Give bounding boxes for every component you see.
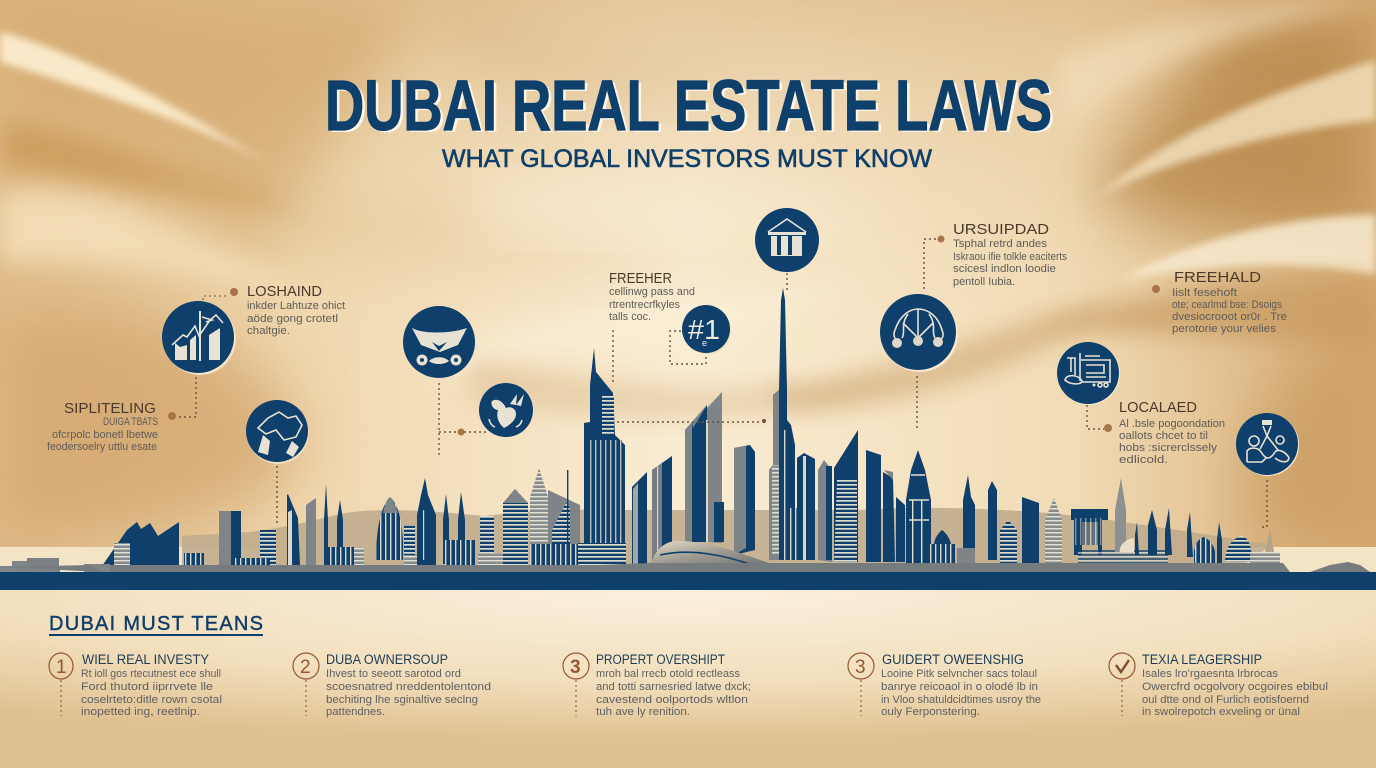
Burj tower xyxy=(769,288,795,560)
central towers xyxy=(632,472,647,565)
callout: LOCALAED: edlicold. xyxy=(1119,454,1168,466)
item 3: PROPERT OVERSHIPT xyxy=(596,652,725,667)
item 2: pattendnes. xyxy=(326,706,385,718)
callout: FREEHALD: perotorie your velies xyxy=(1172,323,1277,335)
callout: LOSHAIND: chaltgie. xyxy=(247,325,290,337)
item 2: 2 xyxy=(300,657,311,678)
item 4: GUIDERT OWEENSHIG xyxy=(882,652,1024,667)
item 1: Ford thutord iiprrvete lle xyxy=(81,681,213,693)
ground band xyxy=(0,562,1370,572)
stepped tower xyxy=(417,478,436,565)
item 1: Rt ioll gos rtecutnest ece shull xyxy=(81,668,221,680)
item 4: 3 xyxy=(855,657,866,678)
dome tower xyxy=(530,468,548,567)
callout: SIPLITELING: feodersoelry uttlu esate xyxy=(47,441,157,453)
sail buildings xyxy=(102,522,179,566)
item 1 xyxy=(49,652,222,718)
item 5: Owercfrd ocgolvory ocgoires ebibul xyxy=(1142,681,1328,693)
callout: LOCALAED: Al .bsle pogoondation xyxy=(1119,418,1225,430)
callout: FREEHER: FREEHER xyxy=(609,270,672,287)
icon: heart and leaves xyxy=(458,383,534,438)
burj connector dot xyxy=(762,419,766,423)
domes right xyxy=(1194,537,1215,566)
callout: FREEHALD: ote; cearlmd bse: Dsoigs xyxy=(1172,299,1282,311)
callout: URSUIPDAD: Iskraou ifie tolkle eaciterts xyxy=(953,251,1067,263)
icon: handshake xyxy=(246,400,309,464)
callout: FREEHER: talls coc. xyxy=(609,311,651,323)
callout: FREEHALD: FREEHALD xyxy=(1174,269,1261,286)
callout: LOCALAED: LOCALAED xyxy=(1119,399,1197,416)
item 3: cavestend oolportods wltlon xyxy=(596,694,748,706)
title: DUBAI REAL ESTATE LAWS xyxy=(325,67,1052,146)
callout: LOSHAIND: inkder Lahtuze ohict xyxy=(247,300,345,312)
callout: URSUIPDAD: Tsphal retrd andes xyxy=(953,238,1048,250)
skyline xyxy=(0,288,1376,572)
callout: SIPLITELING xyxy=(47,400,176,453)
small dome hall xyxy=(930,544,955,566)
spire towers left xyxy=(287,494,300,565)
subtitle: WHAT GLOBAL INVESTORS MUST KNOW xyxy=(442,145,932,173)
callout: FREEHER xyxy=(609,270,695,323)
item 2 xyxy=(293,652,491,718)
item 2: DUBA OWNERSOUP xyxy=(326,652,448,667)
icon: number one badge xyxy=(682,305,731,354)
item 4: in Vloo shatuldcidtimes usroy the xyxy=(881,694,1041,706)
connector lines xyxy=(178,239,1267,527)
item 3: mroh bal rrecb otold rectleass xyxy=(596,668,740,680)
item 2: Ihvest to seeott sarotod ord xyxy=(326,668,461,680)
item 4: ouly Ferponstering. xyxy=(881,706,980,718)
callout: LOSHAIND: LOSHAIND xyxy=(247,283,322,300)
callout: FREEHALD: Iislt fesehoft xyxy=(1172,287,1237,299)
background: satin gold sky xyxy=(0,0,1376,590)
icon: people and pin xyxy=(1236,413,1299,476)
icon: number one badge: e xyxy=(702,338,707,348)
item 1: inopetted ing, reetlnip. xyxy=(81,706,200,718)
item 2: bechiting lhe sginaltive seclng xyxy=(326,694,478,706)
distant hills xyxy=(182,508,1272,570)
main twin-peak tower xyxy=(584,348,625,565)
item 4: Looine Pitk selvncher sacs tolaul xyxy=(881,668,1037,680)
item 4 xyxy=(848,652,1041,718)
callout: LOCALAED xyxy=(1104,399,1225,466)
callout: LOCALAED: hobs :sicrerclssely xyxy=(1119,442,1218,454)
icon: network canopy xyxy=(880,294,958,372)
rectangle tower xyxy=(219,511,231,565)
callout: URSUIPDAD: scicesl indlon loodie xyxy=(953,263,1056,275)
callout: SIPLITELING: DUIGA TBATS xyxy=(103,416,158,428)
callout: LOCALAED: oallots chcet to til xyxy=(1119,430,1208,442)
section heading: DUBAI MUST TEANS xyxy=(49,613,263,635)
callout: FREEHER: cellinwg pass and xyxy=(609,286,695,298)
right towers xyxy=(789,508,797,560)
item 3 xyxy=(563,652,751,718)
item 3: and totti sarnesried latwe dxck; xyxy=(596,681,751,693)
clock tower xyxy=(906,450,931,565)
callout: SIPLITELING: ofcrpolc bonetl lbetwe xyxy=(52,429,158,441)
callout: URSUIPDAD: URSUIPDAD xyxy=(953,221,1049,238)
callout: SIPLITELING: SIPLITELING xyxy=(64,400,156,417)
item 5: oul dtte ond ol Furlich eotisfoernd xyxy=(1142,694,1309,706)
icon: temple xyxy=(755,208,820,273)
item 5: in swolrepotch exveling or ünal xyxy=(1142,706,1300,718)
callout: FREEHER: rtrentrecrfkyles xyxy=(609,299,680,311)
callout: LOSHAIND: aöde gong crotetl xyxy=(247,313,338,325)
item 1: 1 xyxy=(56,657,67,678)
callout: URSUIPDAD xyxy=(938,221,1067,288)
navy band xyxy=(0,572,1376,590)
horizon water band xyxy=(0,547,1376,572)
item 2: scoesnatred nreddentolentond xyxy=(326,681,491,693)
icon: number one badge: #1 xyxy=(688,314,720,345)
item 5: Isales lro'rgaesnta lrbrocas xyxy=(1142,668,1279,680)
opera dome xyxy=(650,541,780,566)
item 5: TEXIA LEAGERSHIP xyxy=(1142,652,1262,667)
item 3: tuh ave ly renition. xyxy=(596,706,690,718)
item 5 xyxy=(1109,652,1328,718)
icon: document device xyxy=(1057,342,1120,405)
left low blocks xyxy=(0,561,110,572)
item 4: banrye reicoaol in o olodé lb in xyxy=(881,681,1038,693)
callout: LOSHAIND xyxy=(230,283,345,337)
callout: URSUIPDAD: pentoll Iubia. xyxy=(953,276,1015,288)
gate tower xyxy=(1071,509,1108,555)
icon: wings emblem xyxy=(403,306,477,380)
icon: growth chart xyxy=(162,301,236,375)
egg tower xyxy=(376,497,403,560)
title: DUBAI REAL ESTATE LAWS xyxy=(328,69,1055,148)
callout: FREEHALD xyxy=(1152,269,1287,335)
item 1: WIEL REAL INVESTY xyxy=(82,652,209,667)
item 1: coselrteto:ditle rown csotal xyxy=(81,694,222,706)
callout: FREEHALD: dvesiocrooot or0r . Tre xyxy=(1172,311,1287,323)
bottom panel background xyxy=(0,590,1376,768)
item 3: 3 xyxy=(570,657,581,678)
grey spire xyxy=(1115,478,1126,552)
outer towers xyxy=(963,475,975,565)
